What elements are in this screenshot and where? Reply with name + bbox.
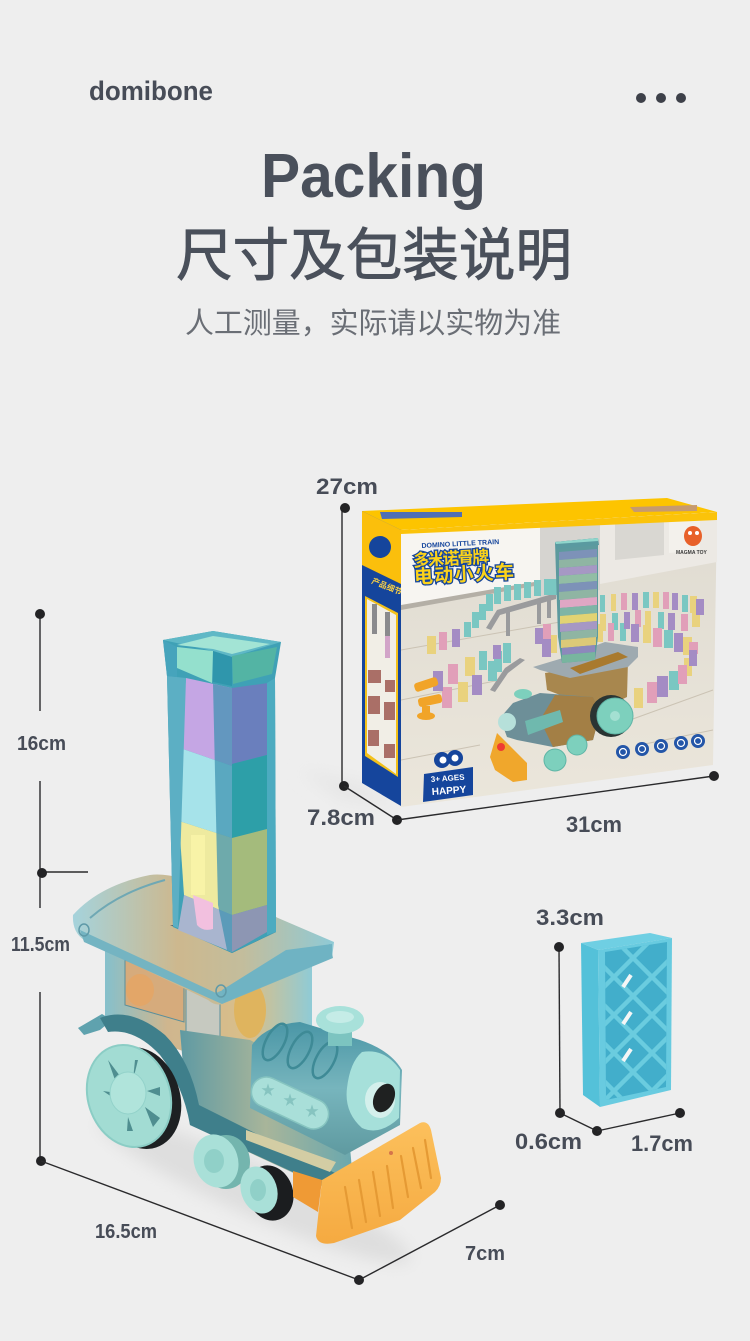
box train wheels bbox=[544, 698, 633, 771]
domino side bbox=[581, 943, 600, 1107]
dimension: domino width 1.7cm bbox=[597, 1108, 693, 1156]
dimension: train tower 16cm: 16cm bbox=[17, 733, 66, 755]
orange toy bbox=[413, 676, 443, 720]
star plate: ★ bbox=[283, 1092, 297, 1108]
domino recess bbox=[605, 942, 667, 1100]
dimension: box width 31cm: 31cm bbox=[566, 812, 622, 837]
domino lattice bbox=[605, 945, 667, 1100]
box title: 电动小火车 bbox=[413, 560, 515, 588]
dimension: domino height 3.3cm bbox=[536, 905, 604, 1113]
box top face bbox=[362, 498, 717, 530]
box train bbox=[490, 538, 638, 782]
rear footplate bbox=[78, 1014, 112, 1035]
roof bbox=[73, 875, 334, 1004]
dimension: train tower 16cm bbox=[17, 609, 66, 755]
lower body bbox=[180, 1030, 352, 1190]
domino top bbox=[581, 933, 672, 950]
boiler bbox=[250, 1020, 402, 1155]
age badge: HAPPY bbox=[431, 785, 467, 798]
brand logo: MAGMA TOY bbox=[676, 550, 707, 556]
box shadow bbox=[300, 770, 401, 807]
dimension: domino width 1.7cm: 1.7cm bbox=[631, 1131, 693, 1156]
title: Packing: Packing bbox=[261, 142, 486, 211]
box title: DOMINO LITTLE TRAIN bbox=[421, 539, 499, 550]
side label: 产品细节 bbox=[370, 576, 404, 597]
dimension: train body 11.5cm bbox=[11, 781, 88, 1166]
age badge: 3+ AGES bbox=[431, 773, 465, 784]
subtitle: 人工测量，实际请以实物为准 bbox=[185, 307, 561, 340]
domino slots bbox=[623, 975, 631, 1061]
dimension: train length 16.5cm: 16.5cm bbox=[95, 1221, 157, 1243]
dimension: box width 31cm bbox=[397, 771, 719, 837]
star plate: ★ bbox=[305, 1103, 319, 1119]
product photo: single domino bbox=[581, 933, 672, 1107]
dimension: domino depth 0.6cm: 0.6cm bbox=[515, 1129, 582, 1154]
dimension: train width 7cm bbox=[359, 1200, 505, 1280]
small wheels bbox=[187, 1129, 322, 1227]
dimension: box height 27cm bbox=[316, 474, 378, 791]
dimension: box depth 7.8cm bbox=[307, 786, 402, 830]
box title: 多米诺骨牌 bbox=[413, 546, 490, 570]
tower right face bands bbox=[213, 678, 276, 952]
heading: size and packing: 尺寸及包装说明 bbox=[176, 224, 572, 288]
tower left face bands bbox=[167, 676, 232, 952]
dimension: train body 11.5cm: 11.5cm bbox=[11, 934, 70, 956]
box top print bbox=[380, 505, 697, 519]
star plate bbox=[247, 1072, 333, 1134]
tower shell bbox=[163, 631, 281, 953]
domino face rim bbox=[598, 938, 672, 1107]
box title bbox=[412, 538, 515, 588]
wall bbox=[401, 512, 717, 608]
box train cowcatcher bbox=[490, 733, 527, 782]
domino tower bbox=[163, 631, 281, 953]
age badge bbox=[423, 750, 473, 802]
feature icons bbox=[616, 734, 705, 759]
dimension: box depth 7.8cm: 7.8cm bbox=[307, 805, 375, 830]
bridge bbox=[486, 593, 556, 692]
dominoes bbox=[427, 579, 704, 708]
brand logo bbox=[676, 526, 707, 556]
tower cap bbox=[163, 631, 281, 686]
brand name: domibone bbox=[89, 76, 213, 106]
chimney bbox=[316, 1006, 364, 1046]
train shadow bbox=[89, 1097, 421, 1283]
dimension: box height 27cm: 27cm bbox=[316, 474, 378, 499]
icon: three dots menu bbox=[636, 93, 686, 103]
dimension: domino depth 0.6cm bbox=[515, 1108, 602, 1154]
product photo: packing box bbox=[300, 498, 717, 807]
dimension: train length 16.5cm bbox=[41, 1161, 364, 1285]
box left side bbox=[362, 511, 404, 806]
box front: photo bbox=[401, 512, 717, 807]
box train tower bbox=[555, 538, 598, 663]
floor boards bbox=[401, 622, 713, 760]
cab body bbox=[105, 945, 312, 1060]
star plate: ★ bbox=[261, 1082, 275, 1098]
headlamp bbox=[347, 1051, 400, 1130]
dimension: train width 7cm: 7cm bbox=[465, 1243, 505, 1265]
cowcatcher bbox=[316, 1122, 441, 1244]
dimension: domino height 3.3cm: 3.3cm bbox=[536, 905, 604, 930]
big wheel bbox=[74, 1034, 194, 1160]
product photo: toy train bbox=[73, 631, 441, 1283]
fender bbox=[100, 1014, 345, 1190]
